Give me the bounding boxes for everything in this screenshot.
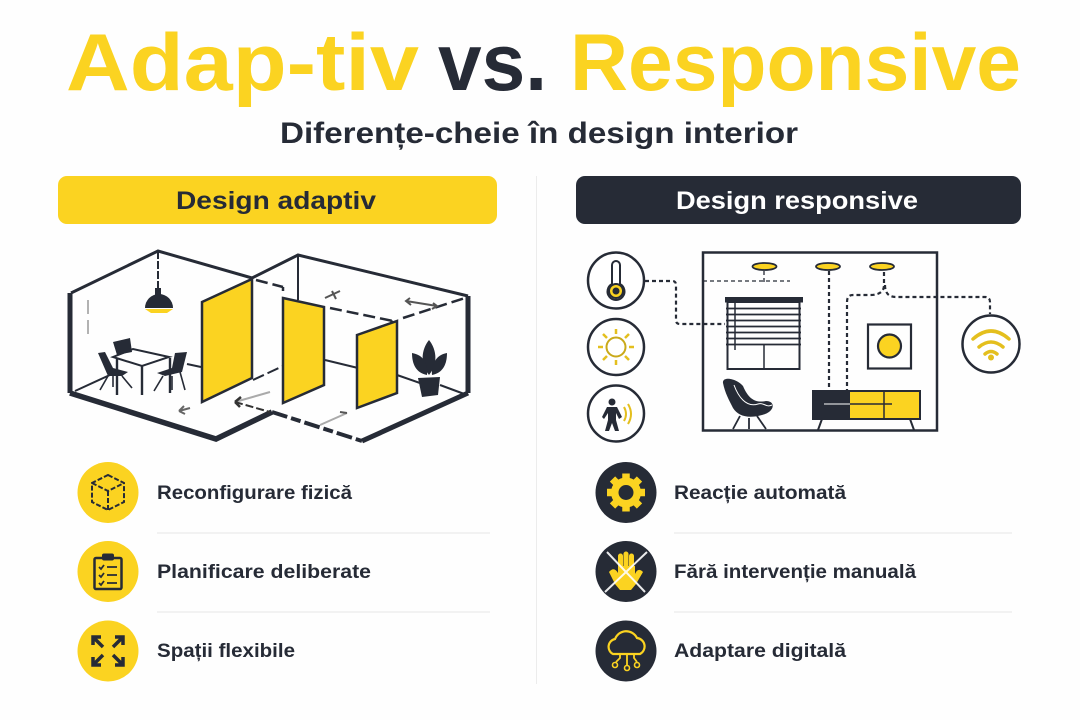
sliding yellow panels bbox=[202, 279, 397, 408]
title: Responsive bbox=[570, 18, 1021, 108]
sideboard bbox=[813, 391, 920, 430]
armchair bbox=[723, 379, 773, 429]
feature: Reacție automată: Reacție automată bbox=[674, 483, 846, 504]
icon: pendant lamp bbox=[145, 288, 173, 313]
feature: Adaptare digitală bbox=[596, 620, 846, 682]
ceiling lights bbox=[752, 263, 894, 270]
dining table and chairs bbox=[98, 338, 187, 395]
title: Adap-tiv bbox=[66, 18, 419, 108]
title: vs. bbox=[438, 18, 547, 108]
title bbox=[66, 18, 1021, 108]
feature: Reconfigurare fizică: Reconfigurare fizică bbox=[157, 483, 352, 504]
room outline bbox=[70, 251, 468, 441]
feature: Reconfigurare fizică bbox=[78, 462, 352, 523]
feature: Fără intervenție manuală bbox=[596, 541, 916, 602]
subtitle: Diferențe-cheie în design interior bbox=[280, 117, 798, 150]
movement arrows bbox=[179, 291, 437, 425]
window blinds bbox=[725, 297, 803, 369]
feature: Fără intervenție manuală: Fără intervenție manuală bbox=[674, 562, 916, 583]
panel: design adaptiv header bbox=[58, 176, 497, 224]
sensor connection lines bbox=[645, 271, 990, 390]
icon: motion sensor bbox=[588, 386, 644, 442]
icon: potted plant bbox=[412, 340, 447, 397]
illustration: reconfigurable room with moving panels bbox=[70, 251, 468, 441]
panel: design adaptiv header: Design adaptiv bbox=[176, 187, 376, 215]
framed yellow circle bbox=[868, 324, 911, 368]
room frame bbox=[703, 252, 937, 430]
icon: sun sensor bbox=[588, 319, 644, 375]
feature: Planificare deliberate bbox=[78, 541, 371, 602]
panel: design responsive header bbox=[576, 176, 1021, 224]
icon: wifi bbox=[962, 316, 1020, 372]
feature: Spații flexibile: Spații flexibile bbox=[157, 641, 295, 662]
illustration: smart room with sensors bbox=[588, 252, 1020, 442]
panel: design responsive header: Design responsive bbox=[676, 187, 918, 215]
feature: Planificare deliberate: Planificare deliberate bbox=[157, 562, 371, 583]
feature: Reacție automată bbox=[596, 462, 846, 523]
icon: thermometer sensor bbox=[588, 252, 644, 308]
feature: Adaptare digitală: Adaptare digitală bbox=[674, 641, 846, 662]
feature: Spații flexibile bbox=[78, 620, 295, 682]
